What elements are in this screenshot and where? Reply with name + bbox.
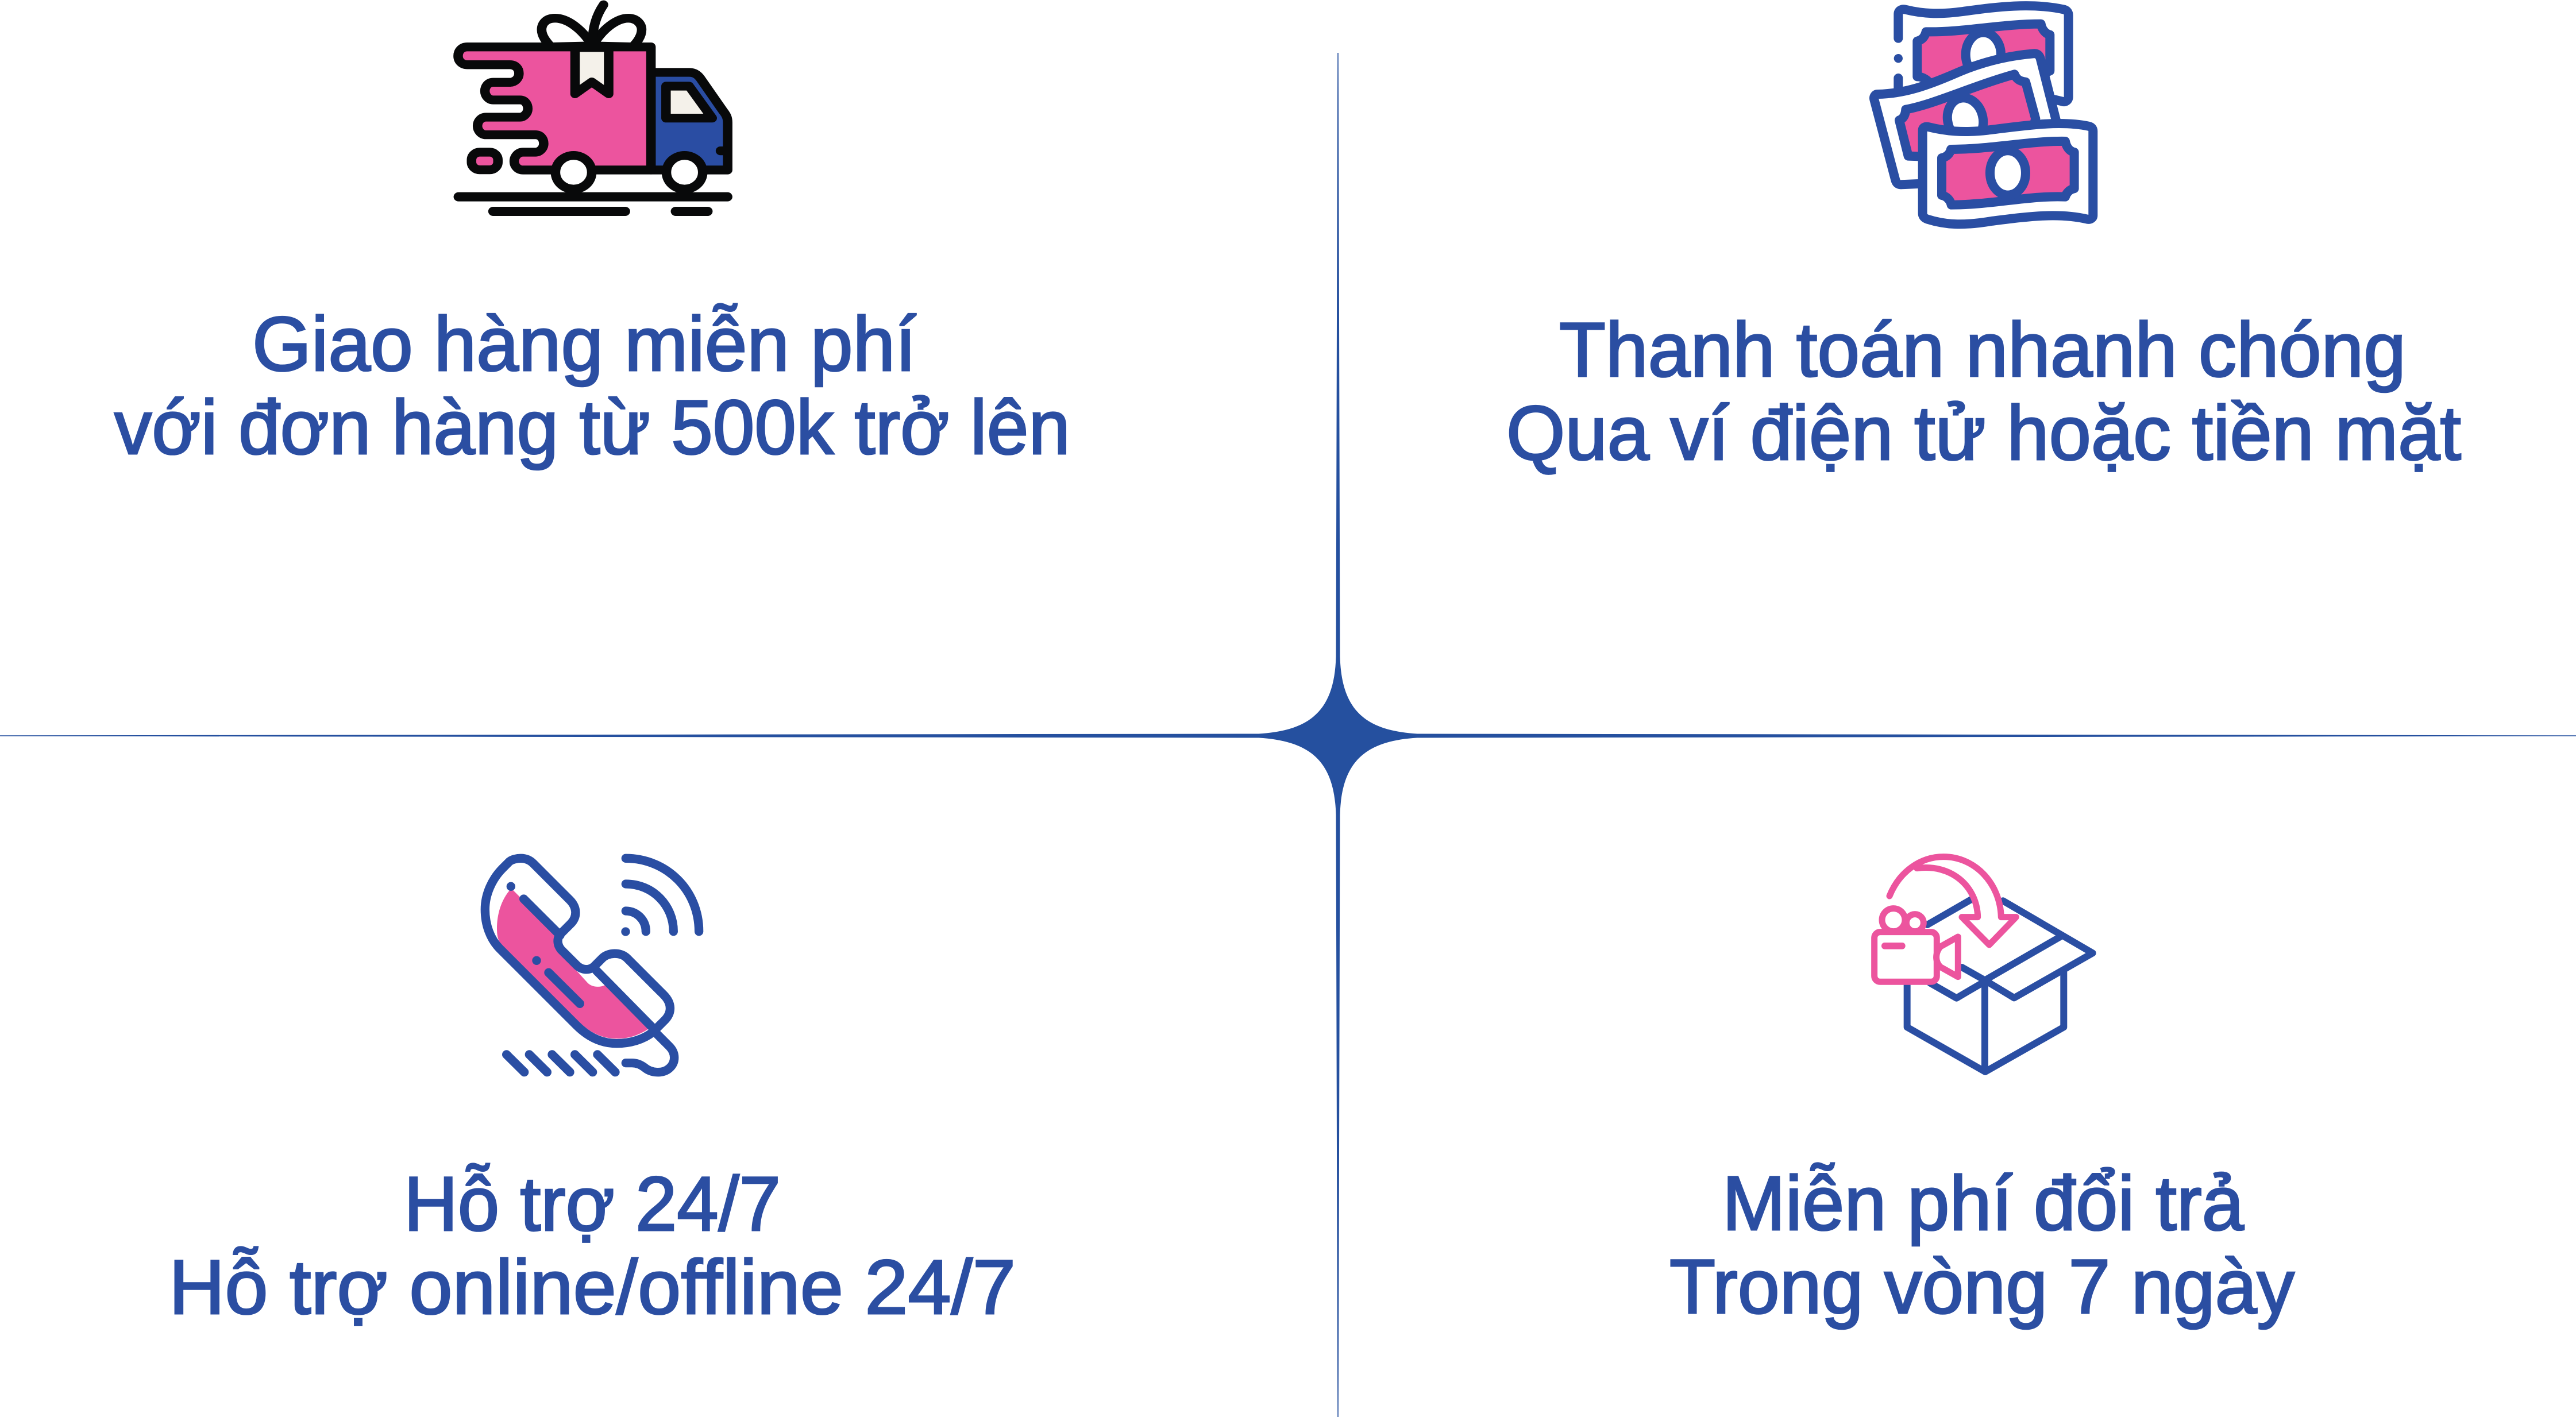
text block: free returns: [1669, 1161, 2295, 1330]
text block: fast payment: [1506, 307, 2461, 476]
icon: delivery truck: [458, 5, 728, 211]
text block: free returns: Trong vòng 7 ngày: [1669, 1244, 2295, 1330]
text block: free delivery: [114, 302, 1070, 470]
text block: 24/7 support: Hỗ trợ 24/7: [404, 1161, 781, 1247]
text block: 24/7 support: [169, 1161, 1016, 1330]
text block: 24/7 support: Hỗ trợ online/offline 24/7: [169, 1245, 1016, 1330]
text block: fast payment: Thanh toán nhanh chóng: [1559, 307, 2406, 393]
icon: return box with camera: [1875, 857, 2093, 1072]
icon: telephone handset: [485, 858, 699, 1072]
text block: free delivery: với đơn hàng từ 500k trở lên: [114, 385, 1070, 470]
text block: free returns: Miễn phí đổi trả: [1722, 1161, 2244, 1246]
text block: free delivery: Giao hàng miễn phí: [252, 302, 916, 387]
icon: banknotes: [1874, 6, 2093, 224]
text block: fast payment: Qua ví điện tử hoặc tiền mặt: [1506, 391, 2461, 476]
